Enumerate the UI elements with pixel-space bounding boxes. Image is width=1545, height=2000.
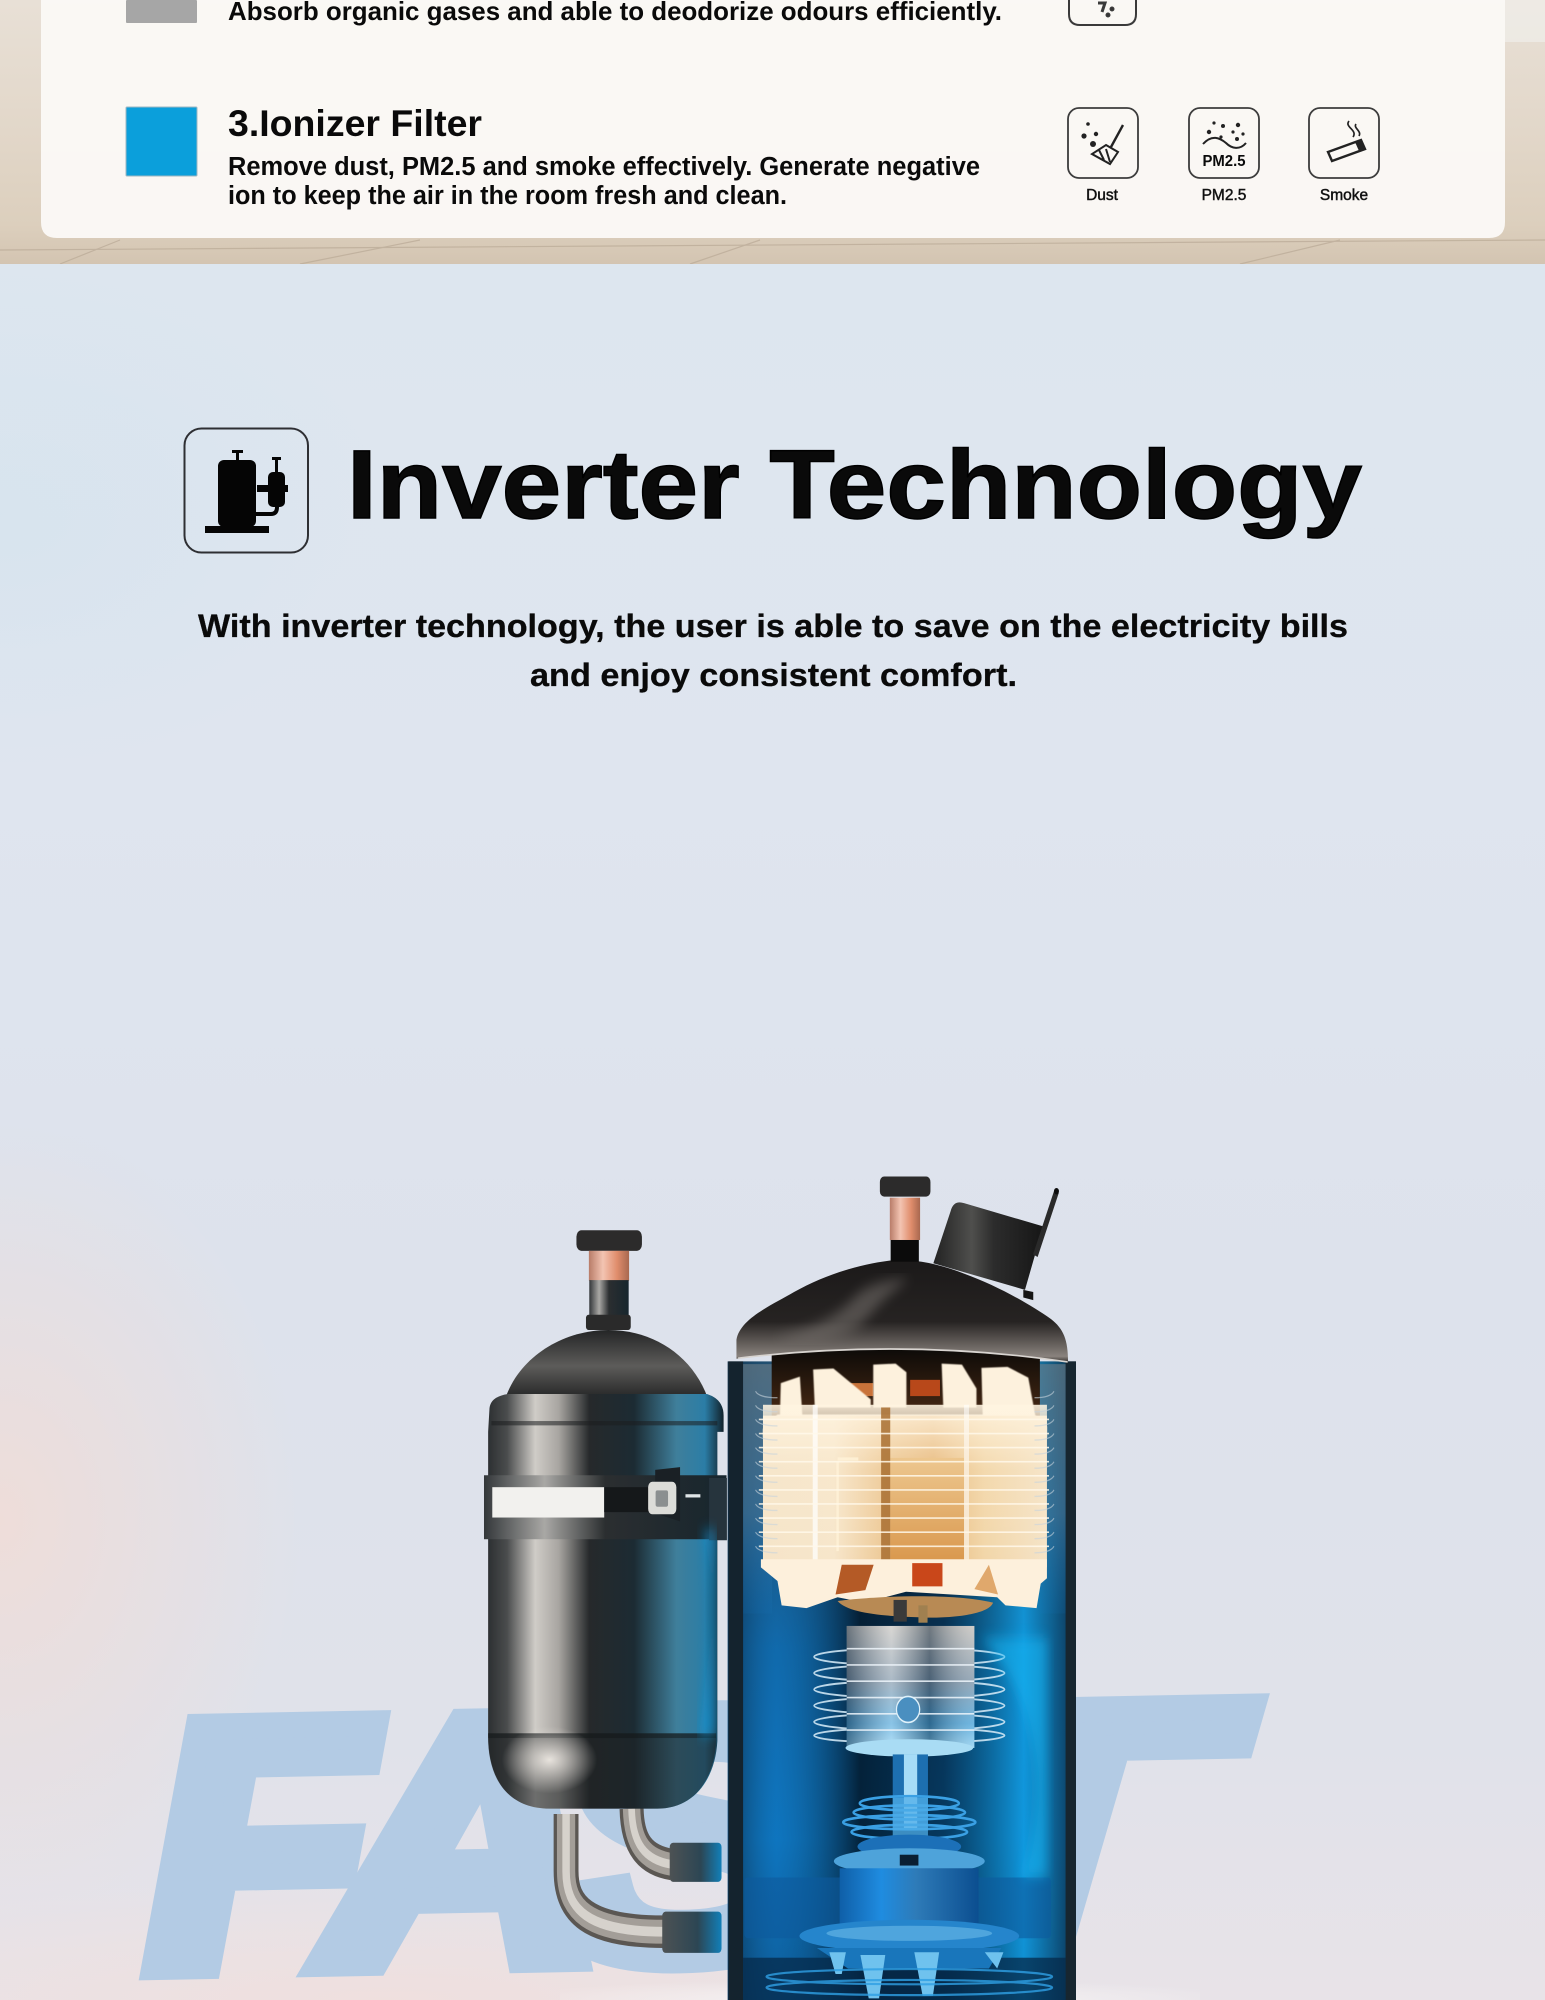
swatch: grey filter colour bbox=[126, 0, 197, 23]
label: dust: Dust bbox=[1086, 187, 1119, 204]
heading icon: compressor bbox=[184, 428, 308, 552]
terminal cover and wire bbox=[933, 1188, 1059, 1300]
section background: wood floor bbox=[0, 0, 1545, 265]
swatch: ionizer blue bbox=[126, 107, 197, 176]
background watermark: FAST bbox=[0, 1650, 1545, 2000]
shell dome bbox=[736, 1260, 1068, 1362]
icon: filter 2 partial icon bbox=[1069, 0, 1136, 25]
label: smoke: Smoke bbox=[1320, 187, 1368, 204]
stator bbox=[756, 1364, 1054, 1623]
panel: filter list card bbox=[41, 0, 1505, 238]
top discharge pipe bbox=[880, 1177, 930, 1262]
shaft and pump bbox=[743, 1638, 1066, 2000]
label: PM2.5: PM2.5 bbox=[1202, 187, 1246, 204]
icon: PM2.5 bbox=[1189, 108, 1259, 178]
accumulator tank bbox=[484, 1230, 727, 1809]
heading: ionizer filter: 3.Ionizer Filter bbox=[228, 103, 482, 144]
text: ionizer description: Remove dust, PM2.5 and smoke effectively. Generate negative bbox=[228, 153, 980, 181]
icon: PM2.5: PM2.5 bbox=[1202, 153, 1246, 170]
text: ionizer description: ion to keep the air in the room fresh and clean. bbox=[228, 182, 787, 210]
rotor with fins bbox=[814, 1626, 1005, 1757]
heading: Inverter Technology: Inverter Technology bbox=[347, 430, 1362, 539]
text: ionizer description bbox=[228, 153, 980, 210]
compressor shell bbox=[728, 1348, 1076, 2000]
text block: intro: With inverter technology, the user is able to save on the electricity bills bbox=[198, 608, 1348, 644]
accumulator pipes bbox=[566, 1809, 722, 1953]
icon: dust bbox=[1068, 108, 1138, 178]
text block: intro: and enjoy consistent comfort. bbox=[530, 657, 1017, 693]
icon: smoke bbox=[1309, 108, 1379, 178]
text block: intro bbox=[198, 608, 1348, 693]
compressor illustration bbox=[484, 1177, 1076, 2000]
